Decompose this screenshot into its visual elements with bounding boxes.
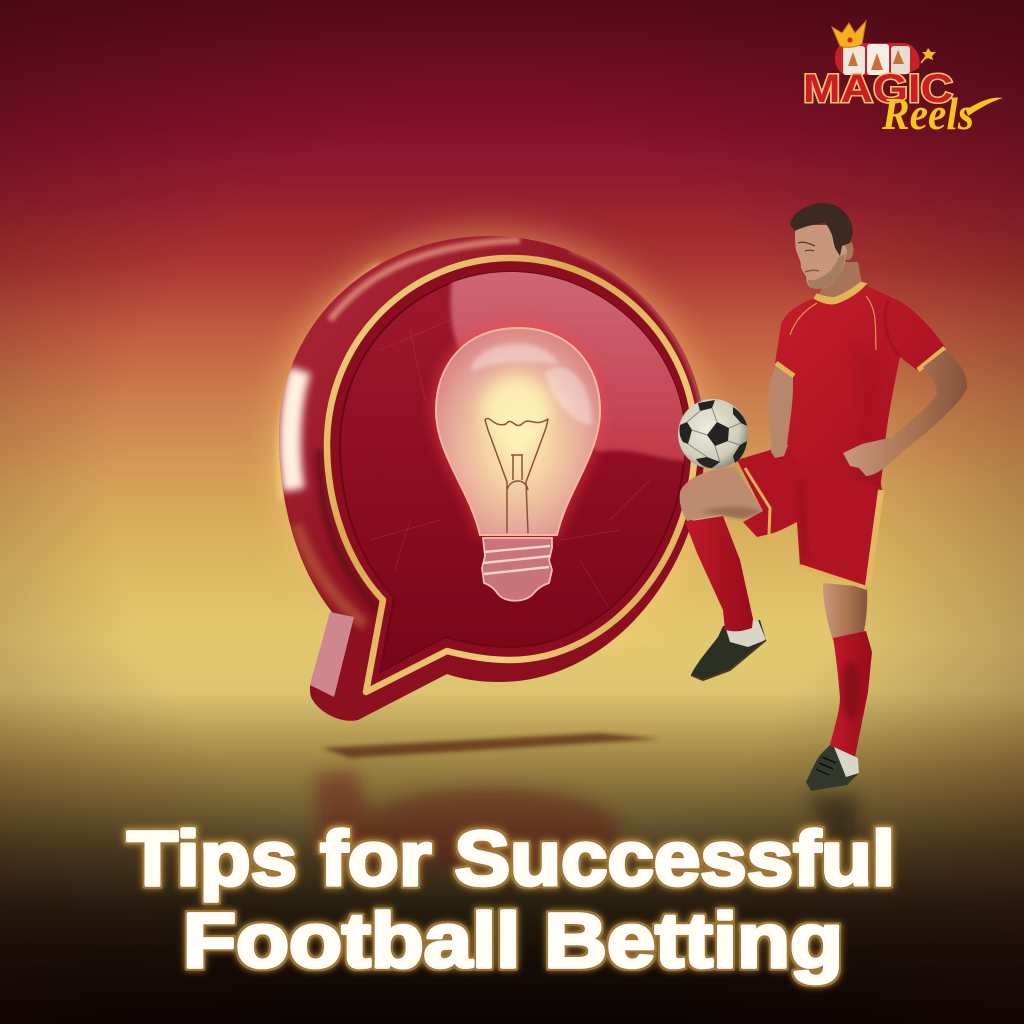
standing sock [830,631,872,757]
bulb highlights [472,344,592,425]
standing boot [806,745,859,791]
title [127,816,895,984]
bubble side highlights [290,240,702,625]
raised thigh [680,467,765,521]
bubble rim glow [280,265,380,500]
football [678,399,748,469]
right arm and hand [843,350,967,476]
bulb filament [485,418,548,533]
bubble glossy sheen [370,260,700,610]
light bulb [436,325,600,601]
floor shadow of bubble [322,733,660,758]
bubble tail side [310,612,354,697]
head [790,203,854,289]
bulb glass [436,328,600,535]
bulb halo [436,325,600,535]
bulb screw base [482,538,552,601]
title line 2: Football Betting [183,898,843,984]
hair [790,203,853,256]
title line 1: Tips for Successful [127,816,895,902]
face [795,225,847,289]
bubble gold ring [327,258,695,692]
collar [815,283,865,303]
brow and eye [798,242,815,251]
bubble glow [279,236,705,640]
neck [817,262,862,303]
floor reflections [315,770,858,880]
brand logo [803,21,1003,139]
logo slot reel [835,43,920,75]
logo script: Reels [881,88,974,139]
beard [808,254,845,289]
raised leg sock [685,516,753,631]
logo crown [832,21,866,47]
bubble extruded body [279,236,705,721]
left arm [768,366,794,457]
standing leg [823,583,867,640]
bulb core glow [482,376,550,444]
left hand [771,443,788,458]
raised foot boot [691,620,766,680]
logo wordmark: MAGIC [803,67,953,111]
standing sock shade [842,660,860,720]
ear [842,240,854,260]
mouth [805,270,819,272]
jersey [775,285,945,488]
football player [678,203,967,791]
logo star wand [921,48,936,63]
speech bubble with light bulb [279,236,705,721]
raised thigh shade [700,507,762,519]
bubble face [340,272,685,672]
shorts [737,444,882,588]
